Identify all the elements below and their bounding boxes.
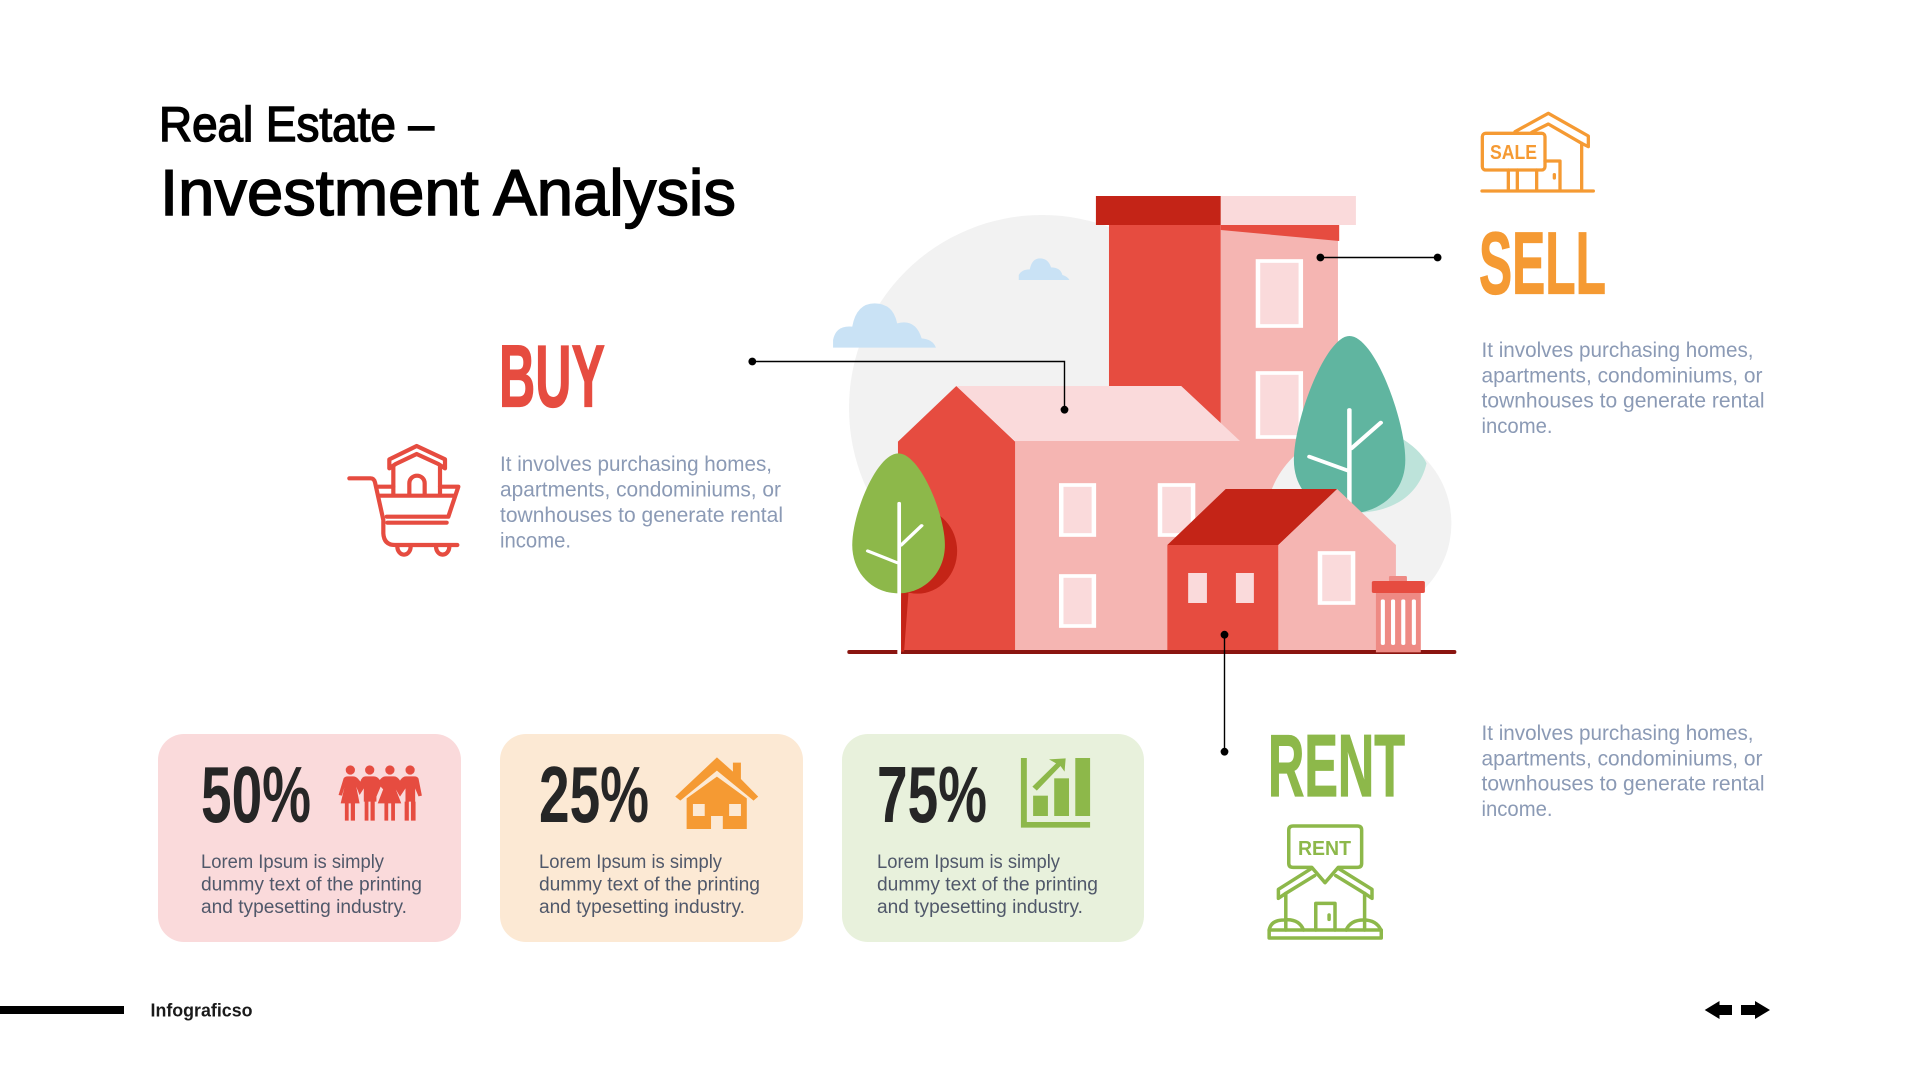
text: buy description (500, 453, 783, 552)
text: panel copy: and typesetting industry. (877, 897, 1083, 918)
icon: house (675, 757, 758, 829)
text: sell description (1482, 339, 1764, 438)
heading: sell: SELL (1479, 214, 1606, 312)
text: sell description: income. (1482, 415, 1552, 438)
background circle (849, 215, 1235, 601)
tower (1096, 196, 1356, 448)
text: panel copy: Lorem Ipsum is simply (539, 852, 722, 873)
text: panel copy: and typesetting industry. (201, 897, 407, 918)
background circle right (1265, 430, 1451, 616)
panel: 50% (158, 734, 461, 942)
panel: 75% (842, 734, 1144, 942)
text: rent description: income. (1482, 798, 1552, 821)
text: panel copy: dummy text of the printing (877, 874, 1098, 896)
arrow: previous (1705, 1001, 1732, 1019)
text: rent description (1482, 722, 1764, 821)
illustration: houses (833, 196, 1456, 654)
heading: rent: RENT (1268, 716, 1405, 815)
stat: 25%: 25% (539, 750, 649, 839)
footer brand: Infograficso (150, 1000, 252, 1020)
main house (898, 386, 1297, 652)
icon: sale house: SALE (1490, 142, 1537, 164)
cloud large (833, 303, 936, 348)
panel: 25% (500, 734, 803, 942)
text: panel copy (877, 852, 1098, 918)
text: panel copy: and typesetting industry. (539, 897, 745, 918)
text: panel copy: dummy text of the printing (539, 874, 760, 896)
stat: 50%: 50% (201, 750, 311, 839)
text: sell description: apartments, condominiums, or (1482, 364, 1762, 388)
small house (1167, 489, 1396, 652)
trash can (1372, 576, 1425, 652)
text: panel copy: dummy text of the printing (201, 874, 422, 896)
text: panel copy: Lorem Ipsum is simply (877, 852, 1060, 873)
connector: buy (748, 358, 1068, 414)
icon: bar chart (1021, 758, 1090, 828)
title: Real Estate – (159, 98, 435, 152)
title: Investment Analysis (160, 156, 736, 229)
ground line (847, 650, 1456, 654)
text: panel copy: Lorem Ipsum is simply (201, 852, 384, 873)
text: rent description: apartments, condominiums, or (1482, 748, 1762, 770)
cloud small (1019, 258, 1069, 280)
text: buy description: income. (500, 530, 571, 552)
text: rent description: townhouses to generate rental (1482, 772, 1764, 796)
text: panel copy (201, 852, 422, 918)
text: sell description: It involves purchasing homes, (1482, 339, 1754, 362)
text: sell description: townhouses to generate rental (1482, 390, 1764, 412)
icon: rent house (1269, 826, 1381, 938)
text: buy description: apartments, condominiums, or (500, 478, 781, 502)
green tree (852, 453, 957, 654)
icon: cart with house (349, 446, 458, 555)
connector: rent (1221, 631, 1228, 756)
stat: 75%: 75% (877, 750, 987, 839)
icon: sale house (1482, 113, 1593, 191)
heading: buy: BUY (499, 326, 605, 426)
connector: sell (1316, 254, 1442, 261)
icon: rent house: RENT (1298, 838, 1351, 860)
arrow: next (1741, 1001, 1770, 1019)
text: panel copy (539, 852, 760, 918)
title (159, 98, 736, 229)
footer bar (0, 1006, 124, 1014)
text: buy description: It involves purchasing homes, (500, 453, 772, 476)
teal tree (1294, 336, 1427, 513)
text: rent description: It involves purchasing homes, (1482, 722, 1754, 745)
icon: people (339, 765, 422, 821)
text: buy description: townhouses to generate rental (500, 504, 783, 527)
